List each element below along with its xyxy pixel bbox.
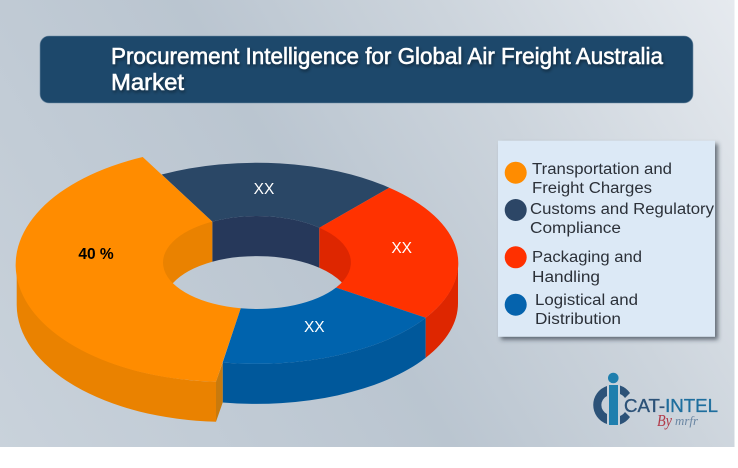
- legend item: customs: Compliance: [530, 220, 621, 237]
- navy segment: [162, 163, 389, 228]
- legend item: packaging: Handling: [532, 269, 600, 286]
- title banner: Procurement Intelligence for Global Air Freight Australia: [111, 43, 663, 69]
- legend item: logistical: Distribution: [535, 311, 621, 328]
- orange segment: [16, 157, 241, 382]
- icon: i stem: [609, 385, 618, 425]
- navy inner wall: [212, 216, 319, 268]
- legend item: transportation: Transportation and: [532, 161, 672, 178]
- legend item: packaging: Packaging and: [532, 249, 642, 266]
- label: orange 40 %: 40 %: [78, 246, 114, 263]
- red outer wall: [426, 263, 458, 358]
- title banner: Market: [111, 69, 185, 95]
- label: red XX: XX: [391, 240, 413, 257]
- icon: i dot: [608, 373, 619, 383]
- legend item: transportation: [505, 161, 672, 197]
- icon: C ring left: [593, 386, 607, 424]
- orange cut face: [216, 362, 223, 422]
- blue outer wall: [223, 318, 426, 404]
- orange outer wall: [17, 265, 216, 422]
- logo byline: [657, 411, 699, 430]
- logo byline: By: [657, 411, 672, 430]
- logo byline: mrfr: [675, 413, 699, 428]
- red segment: [319, 188, 458, 318]
- logo: CAT-INTEL by mrfr: [593, 373, 718, 430]
- 3D donut chart: [16, 157, 458, 422]
- legend item: logistical: [505, 292, 638, 328]
- legend item: packaging: [505, 246, 642, 286]
- legend panel: [498, 141, 715, 337]
- legend item: customs: [505, 199, 714, 237]
- logo wordmark: CAT-INTEL: [624, 396, 718, 416]
- legend item: transportation: Freight Charges: [532, 180, 652, 197]
- legend item: customs: Customs and Regulatory: [530, 201, 714, 218]
- red inner wall: [319, 226, 372, 282]
- icon: C ring right: [620, 386, 630, 424]
- label: navy XX: XX: [254, 181, 275, 198]
- blue segment: [223, 288, 426, 364]
- title banner: [40, 36, 693, 103]
- legend item: logistical: Logistical and: [535, 292, 638, 309]
- label: blue XX: XX: [304, 319, 325, 336]
- orange inner wall: [140, 222, 212, 295]
